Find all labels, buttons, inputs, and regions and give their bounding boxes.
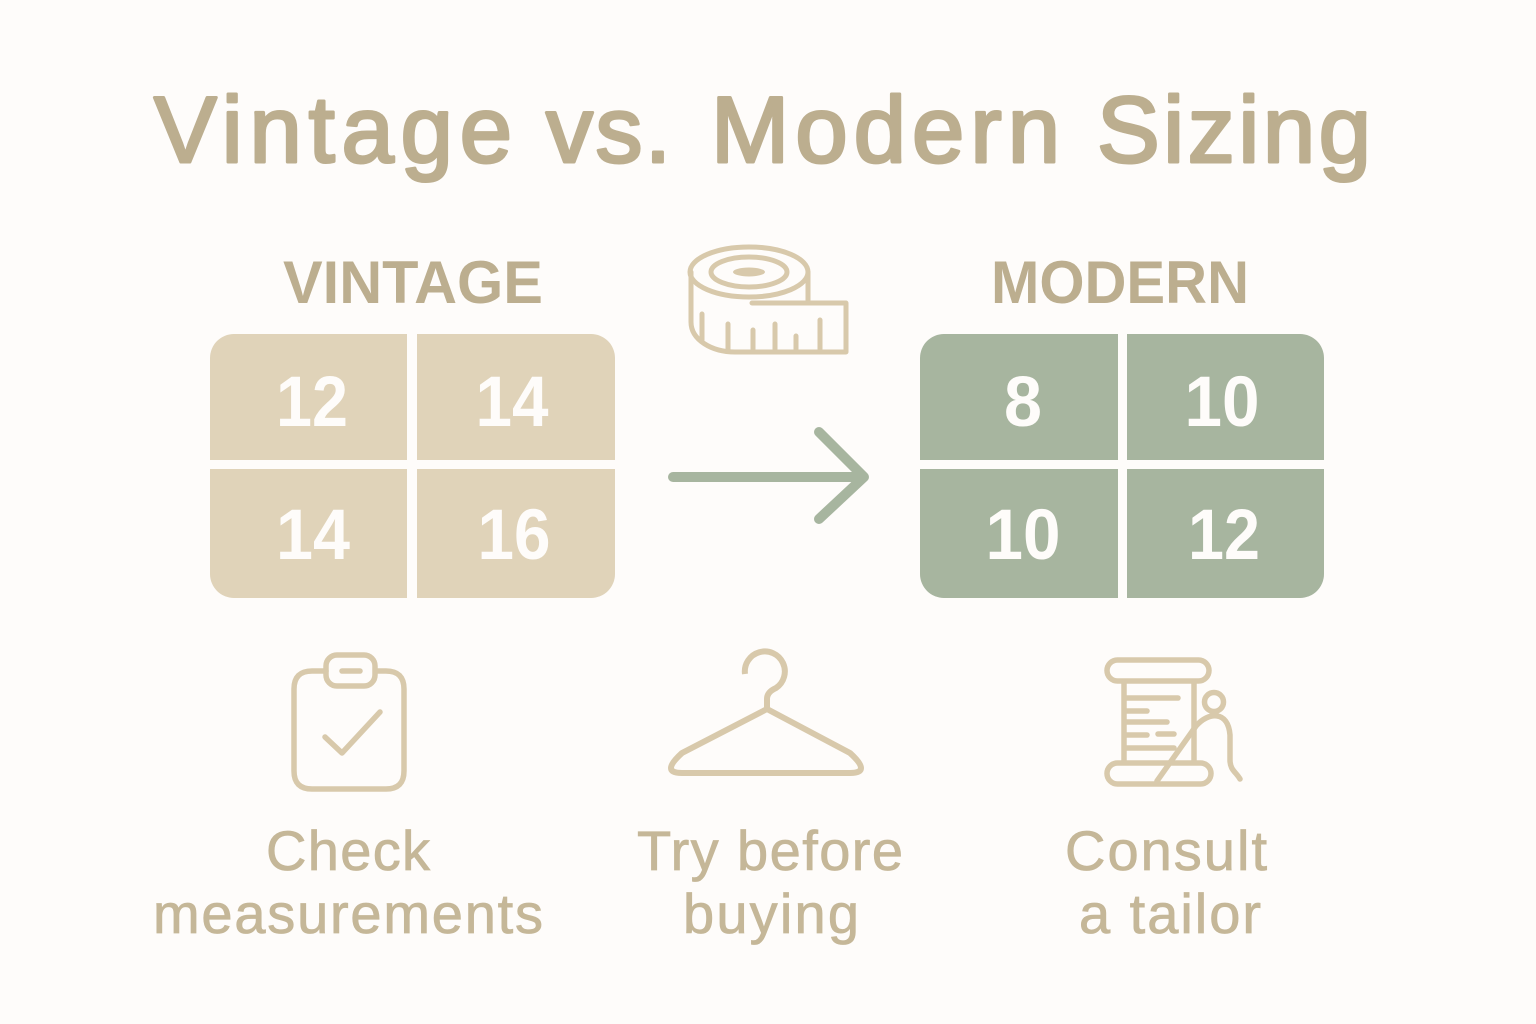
heading: modern: MODERN: [991, 249, 1249, 316]
title: Sizing: [1097, 77, 1371, 182]
arrow: [673, 432, 864, 519]
caption: try before buying: buying: [683, 882, 859, 945]
heading: vintage: VINTAGE: [283, 249, 543, 316]
caption: check measurements: measurements: [153, 882, 543, 945]
caption: check measurements: [153, 819, 543, 945]
caption: consult a tailor: [1065, 819, 1267, 945]
title: vs.: [546, 77, 671, 182]
caption: consult a tailor: a tailor: [1079, 882, 1261, 945]
size: vintage 14 top: 14: [476, 363, 549, 442]
size: modern 10 top: 10: [1184, 363, 1260, 442]
size: vintage 12: 12: [276, 363, 348, 442]
caption: try before buying: [637, 819, 903, 945]
panel: modern sizes: [920, 334, 1324, 598]
title: Vintage: [154, 77, 512, 182]
size: vintage 14 bottom: 14: [276, 496, 350, 575]
caption: try before buying: Try before: [637, 819, 903, 882]
size: modern 10 bottom: 10: [986, 496, 1060, 575]
icon: thread spool and needle: [1107, 660, 1240, 784]
caption: check measurements: Check: [266, 819, 431, 882]
title: Modern: [711, 77, 1060, 182]
panel: vintage sizes: [210, 334, 615, 598]
size: vintage 16: 16: [478, 496, 550, 575]
title: [154, 77, 1371, 182]
caption: consult a tailor: Consult: [1065, 819, 1267, 882]
icon: clipboard checklist: [294, 655, 404, 789]
icon: hanger: [671, 651, 861, 773]
icon: measuring tape: [690, 247, 846, 352]
size: modern 12: 12: [1188, 496, 1260, 575]
size: modern 8: 8: [1004, 363, 1042, 442]
